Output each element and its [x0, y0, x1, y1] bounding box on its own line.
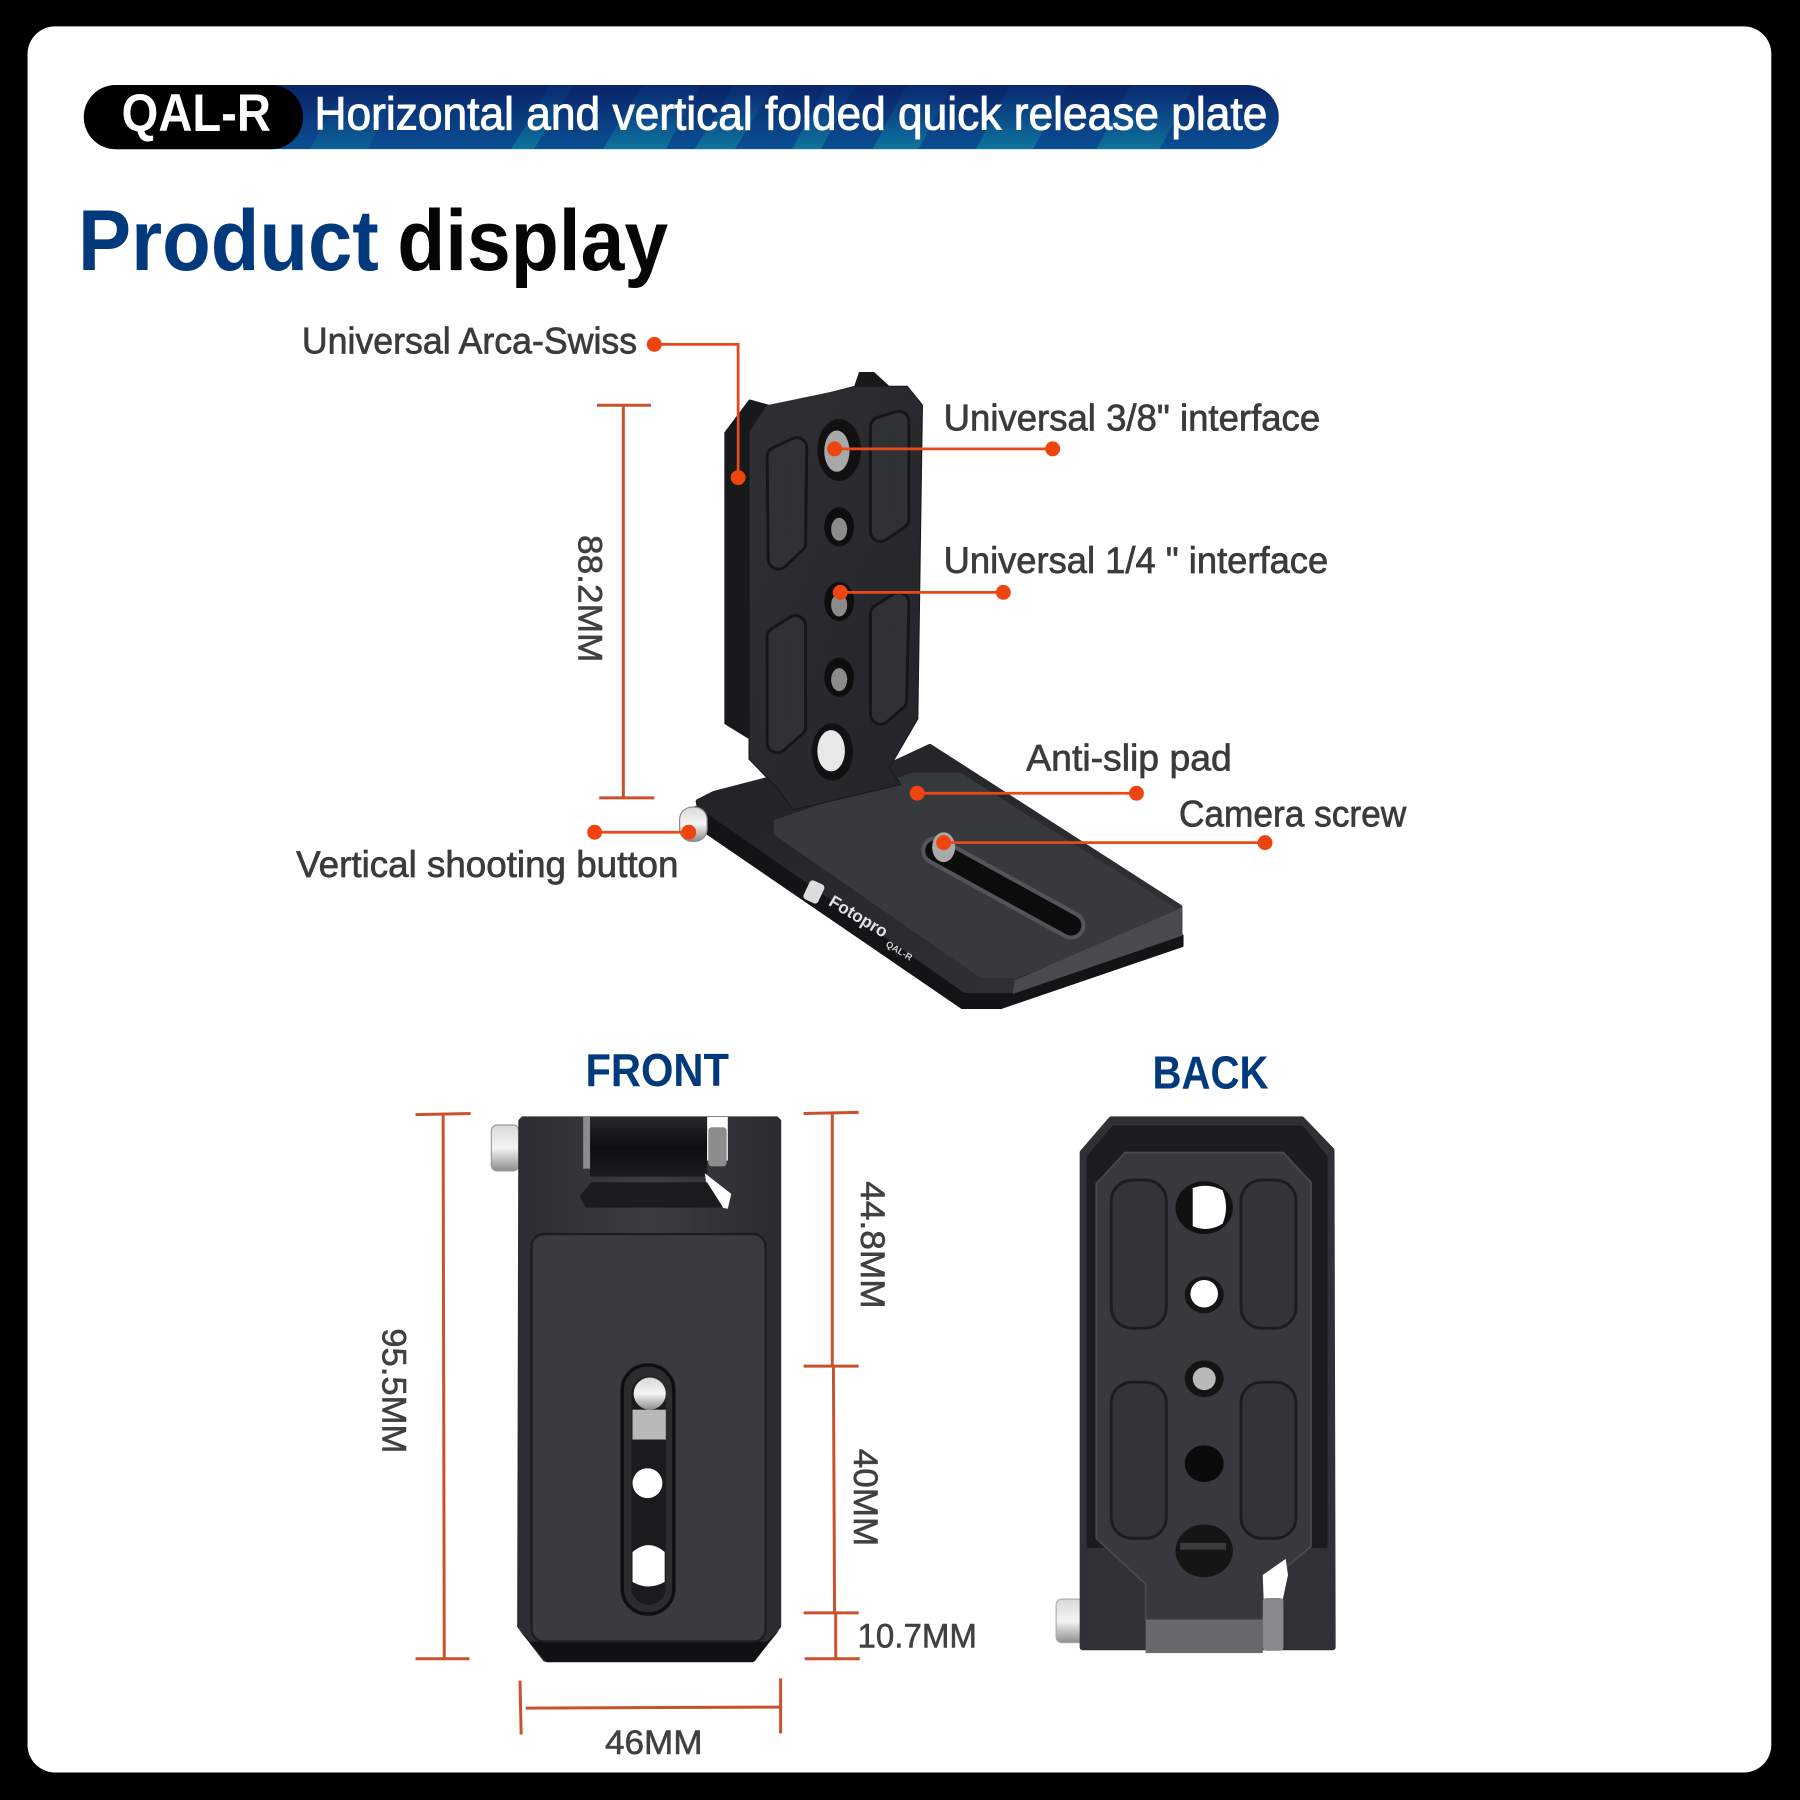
header pill: QAL-R: [122, 84, 271, 143]
callout: 3/8 interface: Universal 3/8" interface: [944, 397, 1320, 438]
dimension: 46MM: 46MM: [605, 1724, 703, 1762]
title: display: [397, 193, 668, 289]
product photo: front view: [491, 1117, 781, 1662]
dimension: 10.7MM: 10.7MM: [858, 1617, 977, 1655]
title: Product: [78, 193, 379, 289]
base plate: [696, 746, 1182, 1008]
product photo: back view: [1056, 1119, 1333, 1653]
base plate: Fotopro: [826, 891, 892, 941]
dimension: 88.2MM: 88.2MM: [571, 535, 609, 662]
callout: Anti-slip pad: [910, 737, 1232, 801]
dimension: 95.5MM: [374, 1114, 471, 1659]
heading: FRONT: FRONT: [585, 1044, 729, 1096]
upright plate: [726, 373, 922, 809]
callout: Camera screw: [936, 794, 1407, 850]
dimension: 88.2MM: [571, 405, 654, 798]
dimension: 40MM: 40MM: [846, 1449, 884, 1546]
product photo: folded plate: [680, 373, 1182, 1008]
callout: Vertical shooting button: [296, 825, 696, 885]
callout: Anti-slip pad: Anti-slip pad: [1026, 737, 1232, 778]
dimension: 10.7MM: [805, 1613, 977, 1659]
callout: 1/4 interface: Universal 1/4 " interface: [944, 540, 1328, 581]
dimension: 40MM: [804, 1366, 884, 1613]
callout: Universal Arca-Swiss: Universal Arca-Swiss: [302, 321, 637, 362]
callout: Universal Arca-Swiss: [302, 321, 746, 485]
callout: Camera screw: Camera screw: [1179, 794, 1407, 835]
title: [78, 193, 668, 289]
dimension: 46MM: [520, 1678, 781, 1762]
callout: 3/8 interface: [827, 397, 1320, 456]
header pill: [84, 84, 1279, 149]
dimension: 44.8MM: [804, 1112, 891, 1366]
header pill: Horizontal and vertical folded quick release plate: [315, 88, 1267, 140]
vertical shooting button: [680, 807, 707, 841]
callout: Vertical shooting button: Vertical shooting button: [296, 844, 678, 885]
dimension: 44.8MM: 44.8MM: [853, 1181, 891, 1309]
base plate: QAL-R: [884, 939, 914, 963]
callout: 1/4 interface: [833, 540, 1328, 600]
heading: BACK: BACK: [1153, 1046, 1268, 1098]
dimension: 95.5MM: 95.5MM: [374, 1328, 412, 1453]
